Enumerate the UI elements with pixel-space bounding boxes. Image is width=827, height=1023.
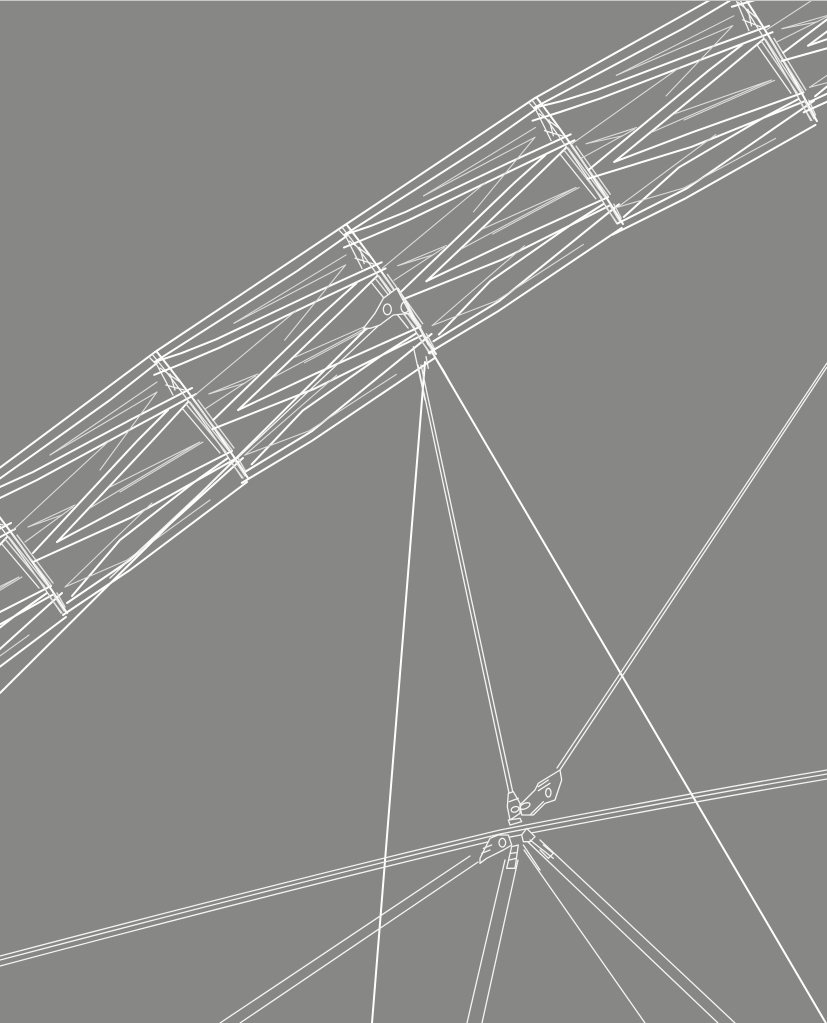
- truss bay 4: [220, 0, 747, 482]
- cable: ring to bottom left: [372, 362, 425, 1023]
- ring shackle: [363, 288, 460, 400]
- cable: ring to central hub: [418, 365, 513, 793]
- cable: right edge to hub: [557, 363, 827, 770]
- truss bay 1: [0, 355, 192, 882]
- truss bay 3: [28, 94, 563, 614]
- central hub with shackles: [480, 770, 562, 870]
- truss bay 6: [619, 0, 827, 232]
- truss bay 2: [0, 220, 373, 747]
- cable: ring to bottom right: [432, 352, 827, 1023]
- lower struts: [220, 840, 735, 1023]
- top edge highlight: [0, 0, 827, 1]
- truss bay 5: [411, 0, 827, 366]
- long diagonal cable to lower left: [0, 322, 378, 693]
- horizontal rim rod: [0, 770, 827, 966]
